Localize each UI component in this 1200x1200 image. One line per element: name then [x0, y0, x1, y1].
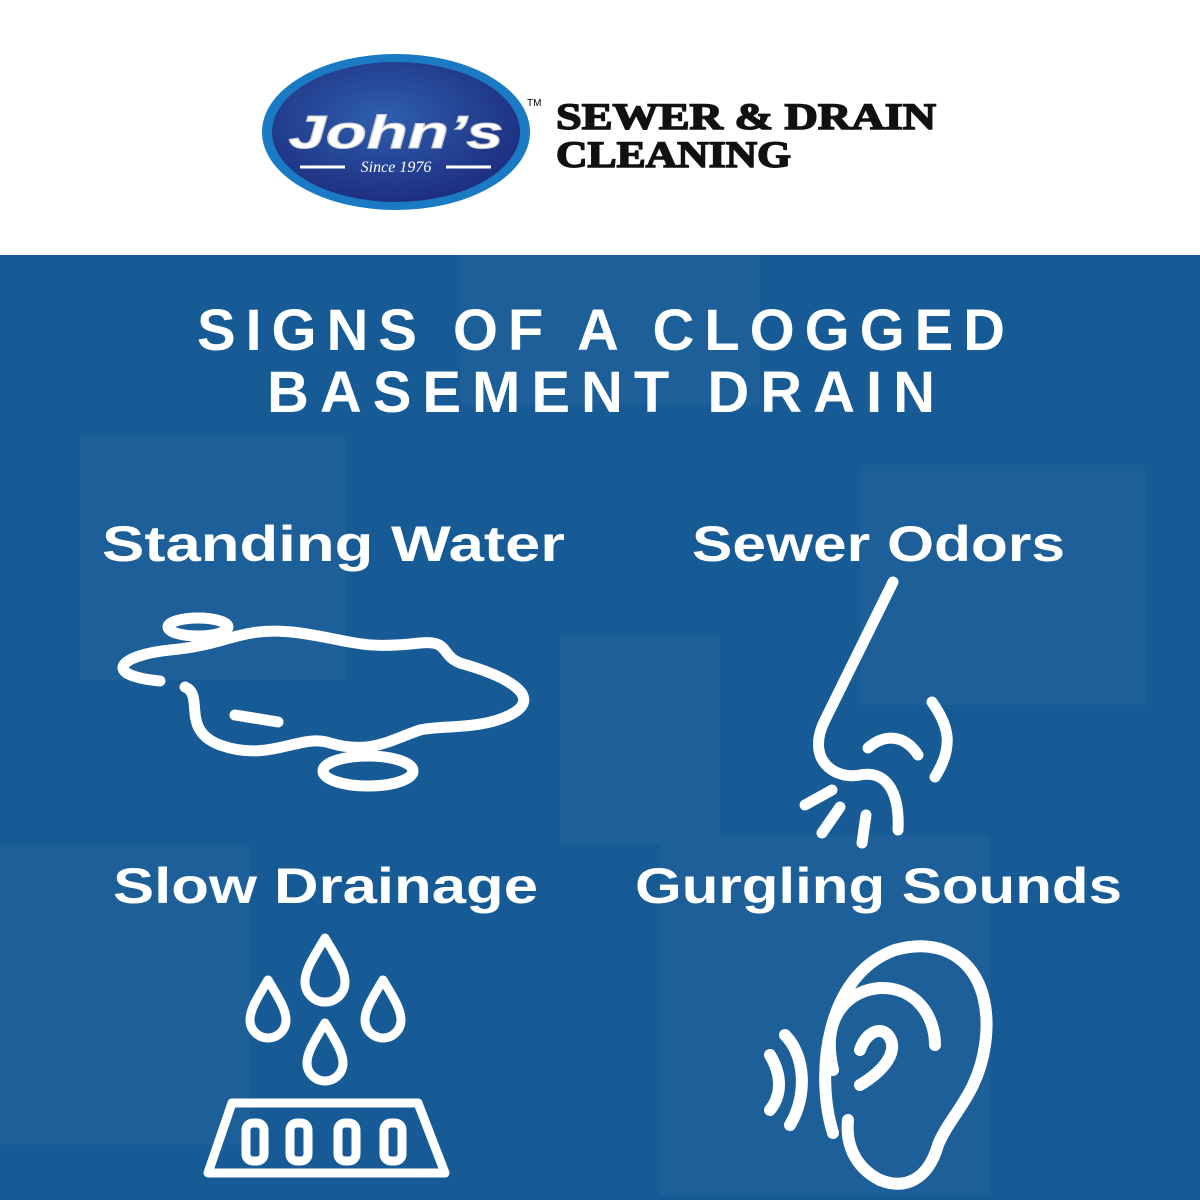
header logo	[0, 0, 1200, 255]
heading: slow drainage: Slow Drainage	[113, 858, 538, 914]
heading: sewer odors: Sewer Odors	[692, 516, 1065, 572]
icon: puddle	[123, 618, 524, 786]
blue panel	[0, 255, 1200, 1200]
logo wordmark: CLEANING	[556, 135, 791, 176]
logo wordmark	[556, 97, 936, 176]
icon: nose	[805, 582, 947, 843]
logo wordmark: SEWER & DRAIN	[556, 97, 936, 138]
logo oval: TM	[527, 98, 541, 109]
logo oval: John’s	[288, 106, 504, 158]
icon: drain drops	[208, 938, 445, 1173]
title	[197, 298, 1005, 425]
icon: ear	[770, 946, 987, 1184]
heading: standing water: Standing Water	[102, 516, 565, 572]
logo oval	[262, 54, 541, 210]
heading: gurgling sounds: Gurgling Sounds	[635, 858, 1122, 914]
title: BASEMENT DRAIN	[267, 360, 935, 425]
title: SIGNS OF A CLOGGED	[197, 298, 1005, 363]
logo oval: Since 1976	[361, 159, 431, 176]
